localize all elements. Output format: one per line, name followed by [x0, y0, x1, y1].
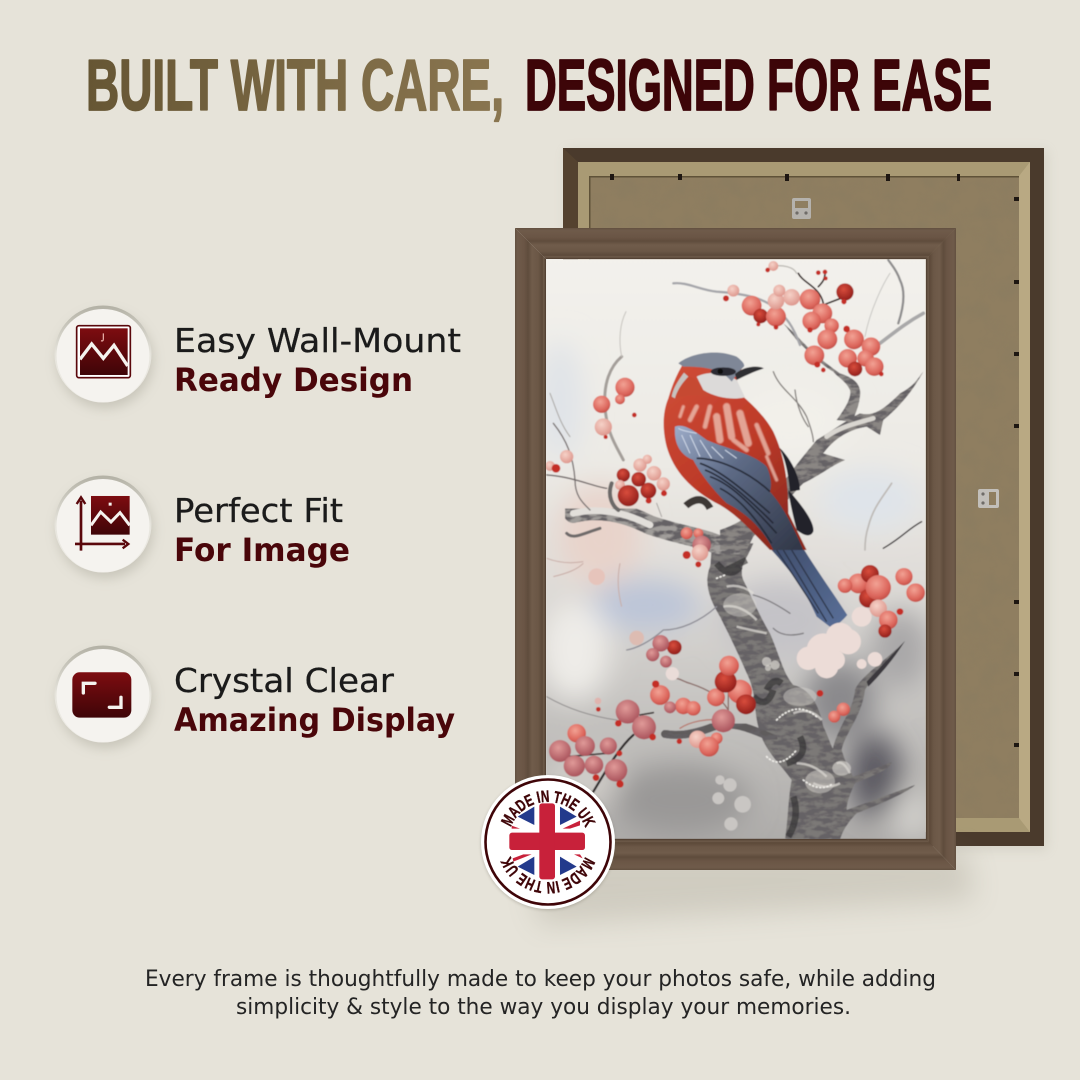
badge text	[500, 790, 596, 894]
feature: perfect fit	[54, 476, 350, 578]
feature text: easy wall-mount ready design: Easy Wall-Mount	[174, 321, 461, 360]
tree and branches, upper	[547, 260, 923, 552]
tree and branches, lower	[547, 543, 915, 840]
badge: made in the uk	[480, 775, 616, 911]
title part: built with care: BUILT WITH CARE,	[86, 46, 504, 126]
berries and blossoms, lower clusters	[549, 544, 925, 831]
bird body	[664, 352, 813, 550]
icon: wall mount picture	[54, 306, 153, 408]
watercolor wash	[538, 340, 934, 841]
hanger clips	[610, 174, 1019, 747]
front frame	[515, 228, 956, 870]
breast feather highlights	[680, 407, 777, 480]
feature text: perfect fit for image: Perfect Fit	[174, 491, 343, 530]
feature: easy wall-mount	[54, 306, 461, 408]
bird tail	[770, 548, 847, 629]
bird	[664, 352, 847, 629]
bird wing	[675, 426, 803, 550]
icon: top sawtooth hanger	[792, 198, 811, 219]
badge text: MADE IN THE UK	[500, 856, 596, 894]
feature text: perfect fit for image: For Image	[174, 531, 350, 569]
feature: crystal clear	[54, 646, 455, 748]
feature text: easy wall-mount ready design: Ready Design	[174, 361, 413, 399]
framed painting: bird on a berry branch	[538, 259, 934, 841]
feature text: easy wall-mount ready design	[174, 321, 461, 399]
icon: image with dimension arrows	[54, 476, 153, 578]
badge text: MADE IN THE UK	[500, 790, 596, 828]
berries, upper clusters	[545, 261, 884, 554]
icon: side sawtooth hanger	[978, 489, 999, 508]
caption: simplicity & style to the way you display your memories.	[236, 995, 851, 1020]
caption	[145, 967, 936, 1020]
feature text: crystal clear amazing display	[174, 661, 455, 739]
back of frame	[563, 148, 1047, 850]
icon: display screen corners	[54, 646, 153, 748]
caption: Every frame is thoughtfully made to keep your photos safe, while adding	[145, 967, 936, 992]
frame shadow	[525, 850, 975, 925]
feature text: crystal clear amazing display: Crystal Clear	[174, 661, 394, 700]
bird head	[697, 373, 745, 398]
icon: union jack flag	[509, 803, 585, 879]
feature text: perfect fit for image	[174, 491, 350, 569]
title	[86, 46, 992, 126]
feature text: crystal clear amazing display: Amazing Display	[174, 701, 455, 739]
